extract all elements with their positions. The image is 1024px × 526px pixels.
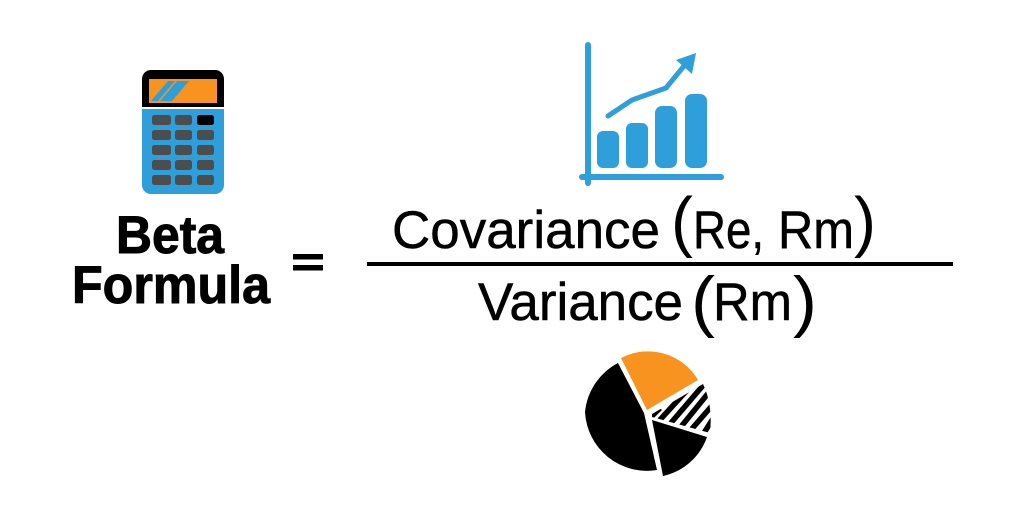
denominator: Variance (Rm): ): [793, 263, 817, 339]
equals sign: [293, 254, 323, 270]
fraction bar: [367, 262, 953, 266]
denominator: Variance (Rm): Variance: [478, 273, 683, 332]
icon: pie chart: [585, 351, 716, 476]
icon: calculator: [142, 70, 224, 194]
numerator: Covariance (Re, Rm): ): [854, 184, 876, 259]
numerator: Covariance (Re, Rm): Re,: [693, 201, 764, 260]
title: Beta Formula: Formula: [72, 256, 270, 315]
denominator: Variance (Rm): (: [691, 263, 715, 339]
denominator: Variance (Rm): Rm: [713, 273, 792, 332]
icon: rising bar chart: [582, 45, 721, 183]
numerator: Covariance (Re, Rm): Rm: [778, 201, 854, 260]
title: Beta Formula: [72, 206, 270, 315]
title: Beta Formula: Beta: [116, 206, 224, 265]
denominator: Variance (Rm): [478, 263, 817, 339]
numerator: Covariance (Re, Rm): (: [671, 184, 693, 259]
numerator: Covariance (Re, Rm): Covariance: [392, 201, 660, 260]
numerator: Covariance (Re, Rm): [392, 184, 876, 260]
